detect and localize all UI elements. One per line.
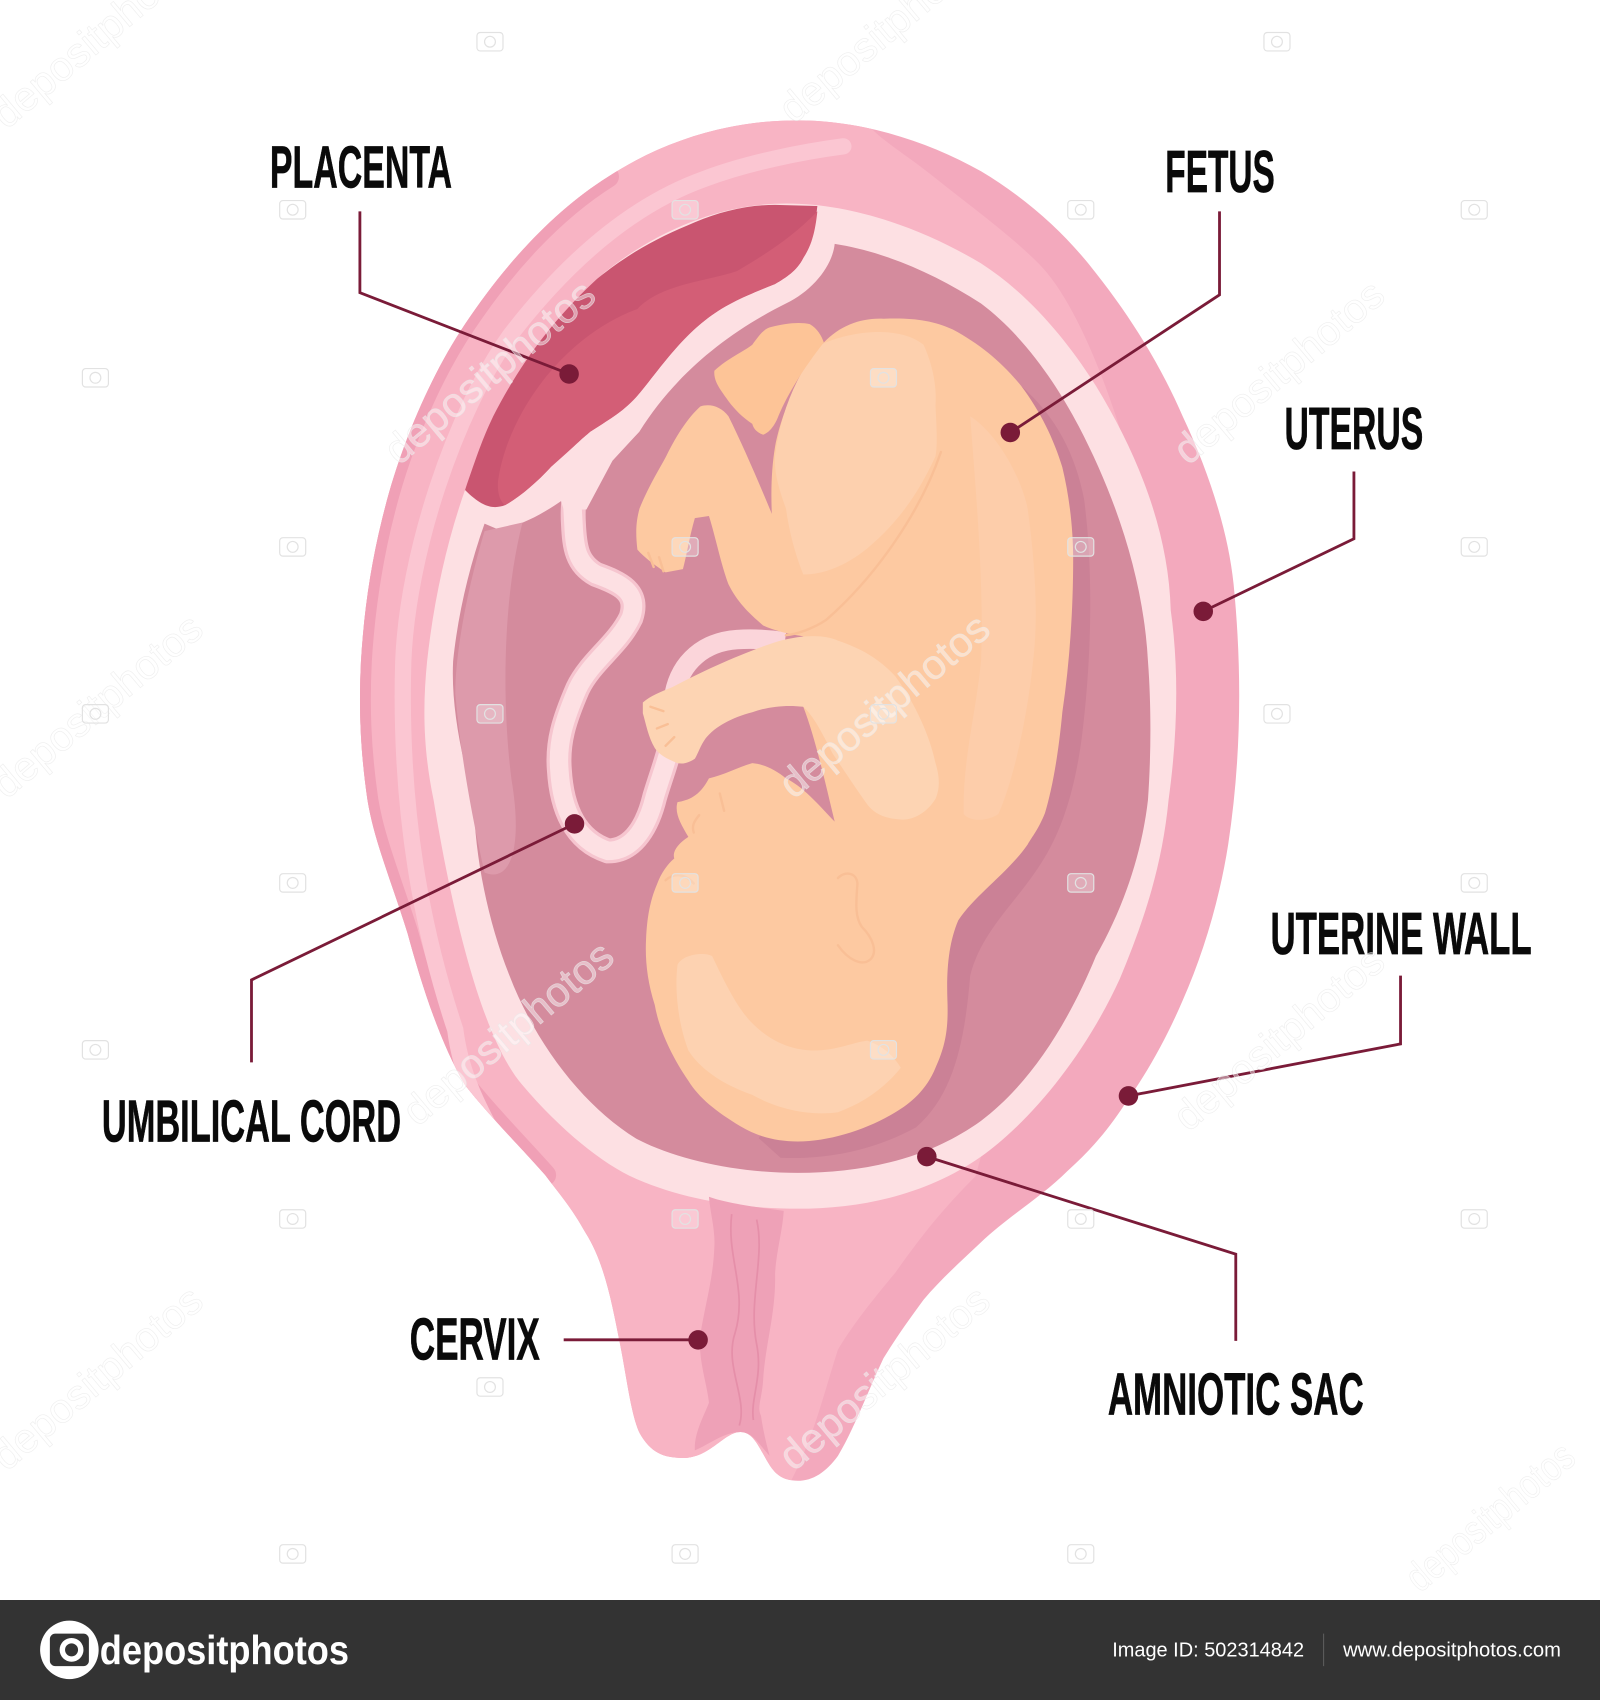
crease and ear details (648, 452, 941, 962)
label: amniotic sac: AMNIOTIC SAC (1108, 1361, 1364, 1428)
watermark layer: depositphotos (1164, 271, 1393, 473)
label: umbilical cord (102, 814, 584, 1154)
watermark layer: depositphotos (394, 932, 622, 1134)
label: umbilical cord: UMBILICAL CORD (102, 1087, 401, 1154)
fetus body (636, 318, 1073, 1141)
back highlight (964, 416, 1036, 820)
uterus shading layers (325, 108, 1149, 1491)
uterus illustration (325, 108, 1239, 1491)
cervix wave lines (731, 1214, 759, 1425)
footer divider (1323, 1634, 1324, 1666)
label: placenta: PLACENTA (270, 134, 452, 201)
icon: camera logo (40, 1621, 99, 1679)
label: placenta (270, 134, 579, 384)
torso highlight (775, 332, 937, 575)
label: uterus (1193, 395, 1423, 621)
watermark layer: depositphotos (770, 1277, 999, 1479)
placenta (465, 205, 817, 507)
fetus shadow (759, 386, 1090, 1158)
footer bar (0, 1600, 1600, 1700)
label: uterus: UTERUS (1285, 395, 1423, 462)
label: fetus (1001, 138, 1275, 442)
crown fold (714, 323, 824, 435)
watermark layer: depositphotos (375, 271, 604, 473)
umbilical cord (551, 431, 785, 851)
front limb (643, 636, 939, 820)
cavity highlight (455, 522, 522, 874)
label: fetus: FETUS (1165, 138, 1275, 205)
head highlight (676, 954, 901, 1113)
fetus (636, 318, 1073, 1141)
amniotic sac ring (424, 204, 1176, 1209)
watermark layer: depositphotos (1164, 937, 1393, 1140)
label: uterine wall (1119, 900, 1532, 1106)
image id: Image ID: 502314842 (1112, 1639, 1304, 1661)
uterus outer wall (360, 120, 1239, 1481)
label: cervix: CERVIX (410, 1305, 540, 1372)
website url: www.depositphotos.com (1342, 1639, 1561, 1661)
amniotic cavity (453, 244, 1150, 1173)
logo wordmark: depositphotos (100, 1627, 349, 1673)
cervix (695, 1197, 784, 1456)
watermark layer: depositphotos (770, 604, 999, 807)
label: amniotic sac (917, 1147, 1364, 1428)
